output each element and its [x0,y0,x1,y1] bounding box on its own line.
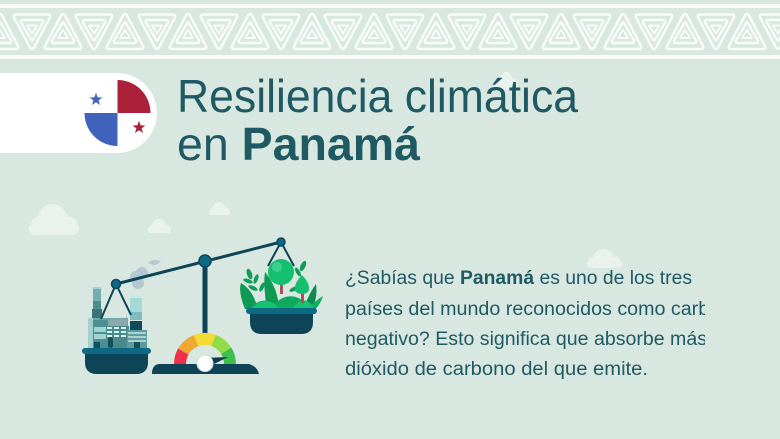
left pan [82,348,151,374]
balance scale illustration [82,238,323,374]
body text: negativo? Esto significa que absorbe más [345,329,707,350]
title: Resiliencia climática [177,70,578,122]
body text: ¿Sabías que Panamá es uno de los tres [345,268,692,289]
smoke [130,260,161,289]
factory [88,287,147,348]
body text: dióxido de carbono del que emite. [345,359,648,380]
flag pill [0,73,157,153]
beam and post [116,242,281,284]
decorative top band [0,4,780,59]
body text [346,270,705,379]
plants [240,259,323,311]
clouds [29,72,622,268]
title: en Panamá [177,118,420,170]
title [177,70,578,170]
right pan [246,308,317,334]
body text: países del mundo reconocidos como carbono [345,299,742,320]
strings [101,242,294,319]
gauge [152,339,259,374]
icon: Panama flag [84,80,150,146]
